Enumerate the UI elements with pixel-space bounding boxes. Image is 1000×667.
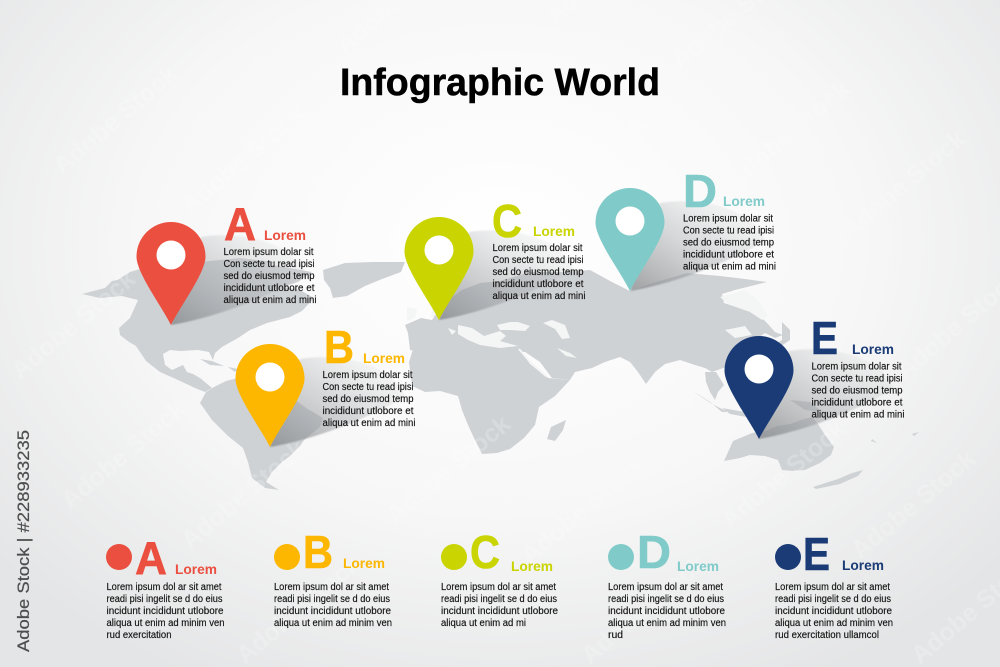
callout A: aliqua ut enim ad mini [224,295,316,306]
Japan [768,322,790,350]
legend D: D [637,526,671,578]
watermark pattern: Adobe Stock [48,60,183,180]
legend A: readi pisi ingelit se d do eius [106,594,222,605]
callout C: C [492,195,522,247]
legend D: readi pisi ingelit se d do eius [608,594,724,605]
watermark pattern: Adobe Stock [56,395,191,515]
legend C: Lorem [511,558,553,574]
legend A: Lorem ipsum dol ar sit amet [106,582,222,593]
Sea of Japan [725,326,752,338]
legend D: rud [608,630,623,641]
callout C: sed do eiusmod temp [492,267,584,278]
legend E [775,528,893,641]
legend D [608,526,726,641]
callout B: incididunt utlobore et [322,406,414,417]
callout C: Lorem ipsum dolar sit [492,243,583,254]
watermark pattern: Adobe Stock [516,450,651,570]
callout A: Con secte tu read ipisi [224,259,314,270]
callout E: incididunt utlobore et [812,398,903,408]
pin A [136,222,206,325]
legend A: incidunt incididunt utlobore [106,606,224,617]
legend E: aliqua ut enim ad minim ven [775,618,893,629]
legend C [441,526,558,629]
North Sea [407,306,445,321]
Arctic islands [105,258,275,288]
callout C: Lorem [533,223,575,239]
callout D: Lorem [723,193,765,209]
callout A: Lorem [264,227,306,243]
Mediterranean Sea [448,325,518,348]
legend E: Lorem [842,557,884,573]
New Zealand [813,432,919,489]
watermark pattern: Adobe Stock [231,550,366,667]
callout B: sed do eiusmod temp [322,394,414,405]
Red Sea line [519,349,546,376]
callout B: Lorem ipsum dolar sit [322,370,413,381]
legend E: Lorem ipsum dol ar sit amet [775,582,890,593]
callout A: incididunt utlobore et [224,283,315,294]
watermark pattern: Adobe Stock [836,125,971,245]
watermark pattern: Adobe Stock [381,75,516,195]
watermark pattern: Adobe Stock [716,415,851,535]
callout E [811,312,904,420]
callout B: aliqua ut enim ad mini [322,418,416,429]
legend C: readi pisi ingelit se d do eius [441,594,557,605]
legend D: aliqua ut enim ad minim ven [608,618,726,629]
Greenland [323,262,405,298]
callout C: incididunt utlobore et [492,279,584,290]
stock id label: Adobe Stock | #228933235 [14,430,33,652]
pin shadows [171,201,894,447]
watermark pattern: Adobe Stock [381,410,516,530]
legend A: Lorem [175,561,217,577]
callout D: aliqua ut enim ad mini [683,262,776,272]
callout D: Lorem ipsum dolar sit [683,214,773,224]
Madagascar [547,420,566,441]
legend A: A [135,532,167,584]
watermark pattern: Adobe Stock [176,100,311,220]
legend E: readi pisi ingelit se d do eius [775,594,891,605]
South America [200,378,323,490]
watermark pattern: Adobe Stock [176,435,311,555]
title: Infographic World [340,62,660,104]
watermark pattern: Adobe Stock [6,265,141,385]
legend C: C [470,526,500,578]
Africa [409,338,570,454]
Australia [724,417,834,471]
callout C [492,195,586,302]
legend D: incidunt incididunt utlobore [608,606,725,617]
watermark pattern: Adobe Stock [721,75,856,195]
callout D [683,165,776,272]
legend C: Lorem ipsum dol ar sit amet [441,582,556,593]
pin C [404,217,474,320]
legend B: Lorem [343,555,385,571]
callout E: Lorem ipsum dolar sit [812,362,902,372]
North America [82,262,314,392]
legend E: E [803,528,830,580]
legend B: readi pisi ingelit se d do eius [274,594,390,605]
callout A: Lorem ipsum dolar sit [224,247,314,258]
legend B: Lorem ipsum dol ar sit amet [274,582,389,593]
callout E: E [811,312,838,364]
watermark pattern: Adobe Stock [516,110,651,230]
callout D: incididunt utlobore et [683,250,774,260]
world map [82,258,919,490]
callout A: sed do eiusmod temp [224,271,315,282]
callout E: Con secte tu read ipisi [812,374,902,384]
legend C: incidunt incididunt utlobore [441,606,558,617]
pin B [236,344,304,447]
Caribbean islands [200,359,238,372]
callout D: Con secte tu read ipisi [683,226,774,236]
callout B: Lorem [363,350,405,366]
Caspian Sea [543,320,570,339]
Persian Gulf [557,348,577,358]
legend A: rud exercitation [106,630,172,641]
Black Sea [497,322,530,331]
legend A: aliqua ut enim ad minim ven [106,618,224,629]
Eurasia [405,270,783,384]
legend E: rud exercitation ullamcol [775,630,879,641]
pin D [596,188,664,291]
watermark pattern: Adobe Stock [846,445,981,565]
pin E [724,336,794,439]
callout A: A [224,198,256,250]
legend C: aliqua ut enim ad mi [441,618,526,629]
watermark pattern: Adobe Stock [576,550,711,667]
callout B [322,321,416,429]
legend A [106,532,224,641]
legend D: Lorem [677,558,719,574]
Southeast Asia and Indonesia [693,372,770,418]
legend E: incidunt incididunt utlobore [775,606,892,617]
callout D: sed do eiusmod temp [683,238,774,248]
callout A [224,198,316,306]
callout B: B [324,321,354,373]
legend B: B [303,526,333,578]
callout E: sed do eiusmod temp [812,386,903,396]
callout E: aliqua ut enim ad mini [812,410,904,420]
legend B: aliqua ut enim ad minim ven [274,618,392,629]
seas [407,290,768,358]
callout C: aliqua ut enim ad mini [492,291,586,302]
callout B: Con secte tu read ipisi [322,382,414,393]
legend B [274,526,392,629]
New Guinea [790,400,822,412]
Sea of Okhotsk [720,290,768,320]
legend D: Lorem ipsum dol ar sit amet [608,582,723,593]
callout C: Con secte tu read ipisi [492,255,584,266]
callout D: D [683,165,717,217]
callout E: Lorem [852,341,894,357]
legend B: incidunt incididunt utlobore [274,606,391,617]
